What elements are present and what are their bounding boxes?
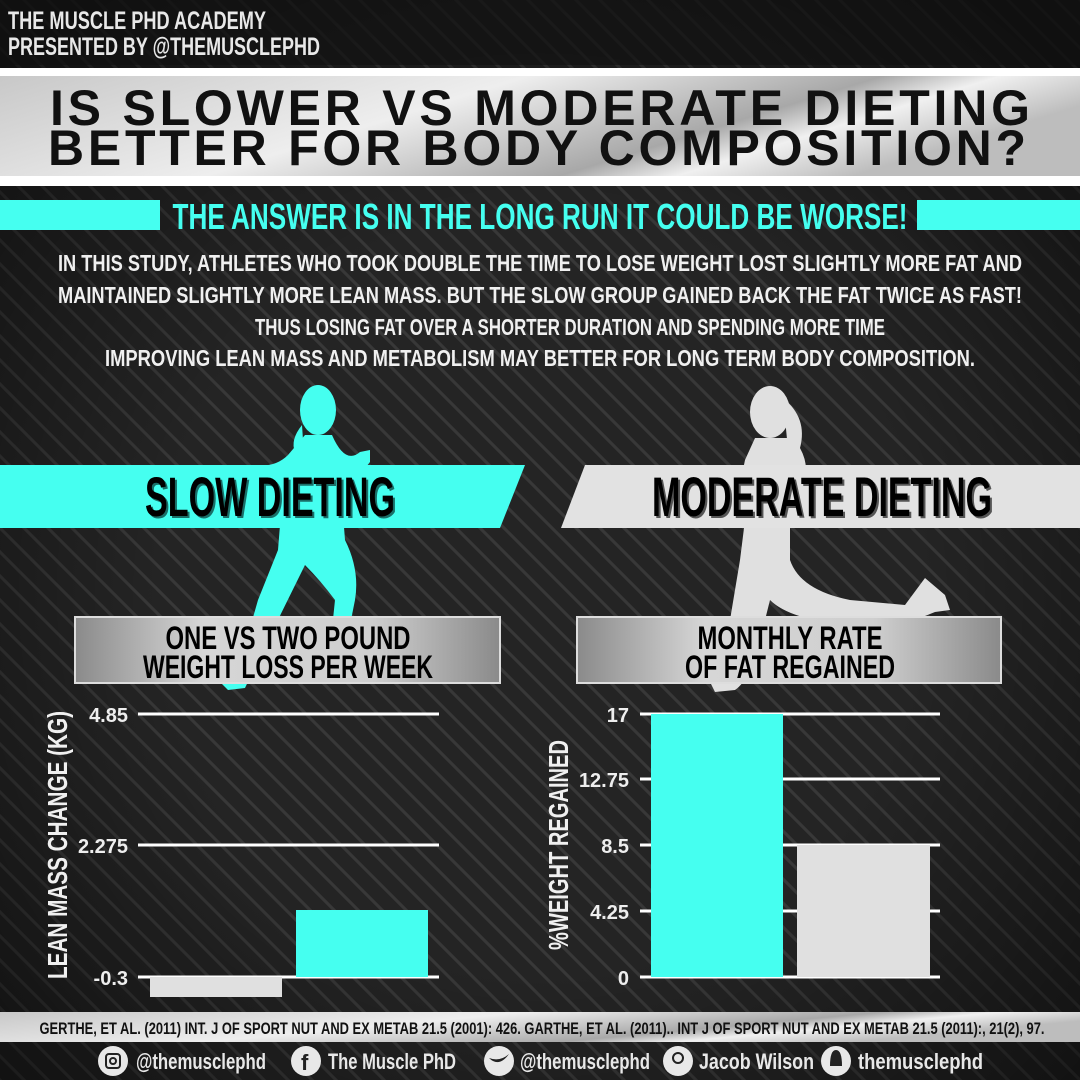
- title banner: [0, 68, 1080, 186]
- social links row: [98, 1046, 983, 1076]
- social links row: Jacob Wilson: [699, 1049, 814, 1074]
- bar chart: lean mass change: 2.275: [78, 836, 128, 858]
- bar chart: fat regained: [543, 705, 940, 990]
- bar chart: fat regained: 0: [618, 968, 629, 990]
- title banner: IS SLOWER VS MODERATE DIETING: [50, 80, 1030, 136]
- social links row: @themusclephd: [520, 1049, 650, 1074]
- social links row: The Muscle PhD: [328, 1049, 456, 1074]
- header: academy credit: PRESENTED BY @THEMUSCLEPHD: [8, 33, 320, 61]
- citation band: [0, 1012, 1080, 1042]
- bar chart: fat regained: %WEIGHT REGAINED: [543, 740, 574, 950]
- icon: twitter: [484, 1046, 514, 1076]
- header: academy credit: [8, 7, 320, 61]
- chart label: monthly rate: MONTHLY RATE: [698, 620, 882, 656]
- bar chart: lean mass change: LEAN MASS CHANGE (KG): [42, 711, 73, 979]
- summary paragraph: [58, 250, 1022, 371]
- chart label: one vs two pound: ONE VS TWO POUND: [166, 620, 410, 656]
- title banner: BETTER FOR BODY COMPOSITION?: [48, 120, 1026, 176]
- icon: snapchat: [821, 1046, 851, 1076]
- bar chart: lean mass change: [42, 705, 439, 997]
- icon: cyan runner silhouette: [220, 385, 370, 690]
- icon: facebook: f: [301, 1050, 309, 1075]
- icon: white runner silhouette: [710, 386, 950, 692]
- banner: slow dieting: SLOW DIETING: [147, 467, 397, 530]
- chart label: monthly rate: OF FAT REGAINED: [685, 649, 895, 685]
- banner: slow dieting: SLOW DIETING: [145, 465, 395, 528]
- social links row: @themusclephd: [136, 1049, 266, 1074]
- bar chart: lean mass change: 4.85: [89, 705, 128, 727]
- header: academy credit: THE MUSCLE PHD ACADEMY: [8, 7, 266, 35]
- icon: location: [663, 1046, 693, 1076]
- bar chart: fat regained: 17: [607, 705, 629, 727]
- icon: instagram: [98, 1046, 128, 1076]
- chart label: one vs two pound: WEIGHT LOSS PER WEEK: [143, 649, 433, 685]
- bar chart: lean mass change: -0.3: [94, 968, 128, 990]
- chart label: monthly rate: [577, 617, 1001, 685]
- bar chart: fat regained: 8.5: [601, 836, 629, 858]
- icon: facebook: [291, 1046, 321, 1076]
- chart label: one vs two pound: [75, 617, 500, 685]
- banner: slow dieting: [0, 465, 525, 530]
- social links row: themusclephd: [858, 1049, 983, 1074]
- bar chart: fat regained: 12.75: [579, 770, 629, 792]
- bar chart: fat regained: 4.25: [590, 902, 629, 924]
